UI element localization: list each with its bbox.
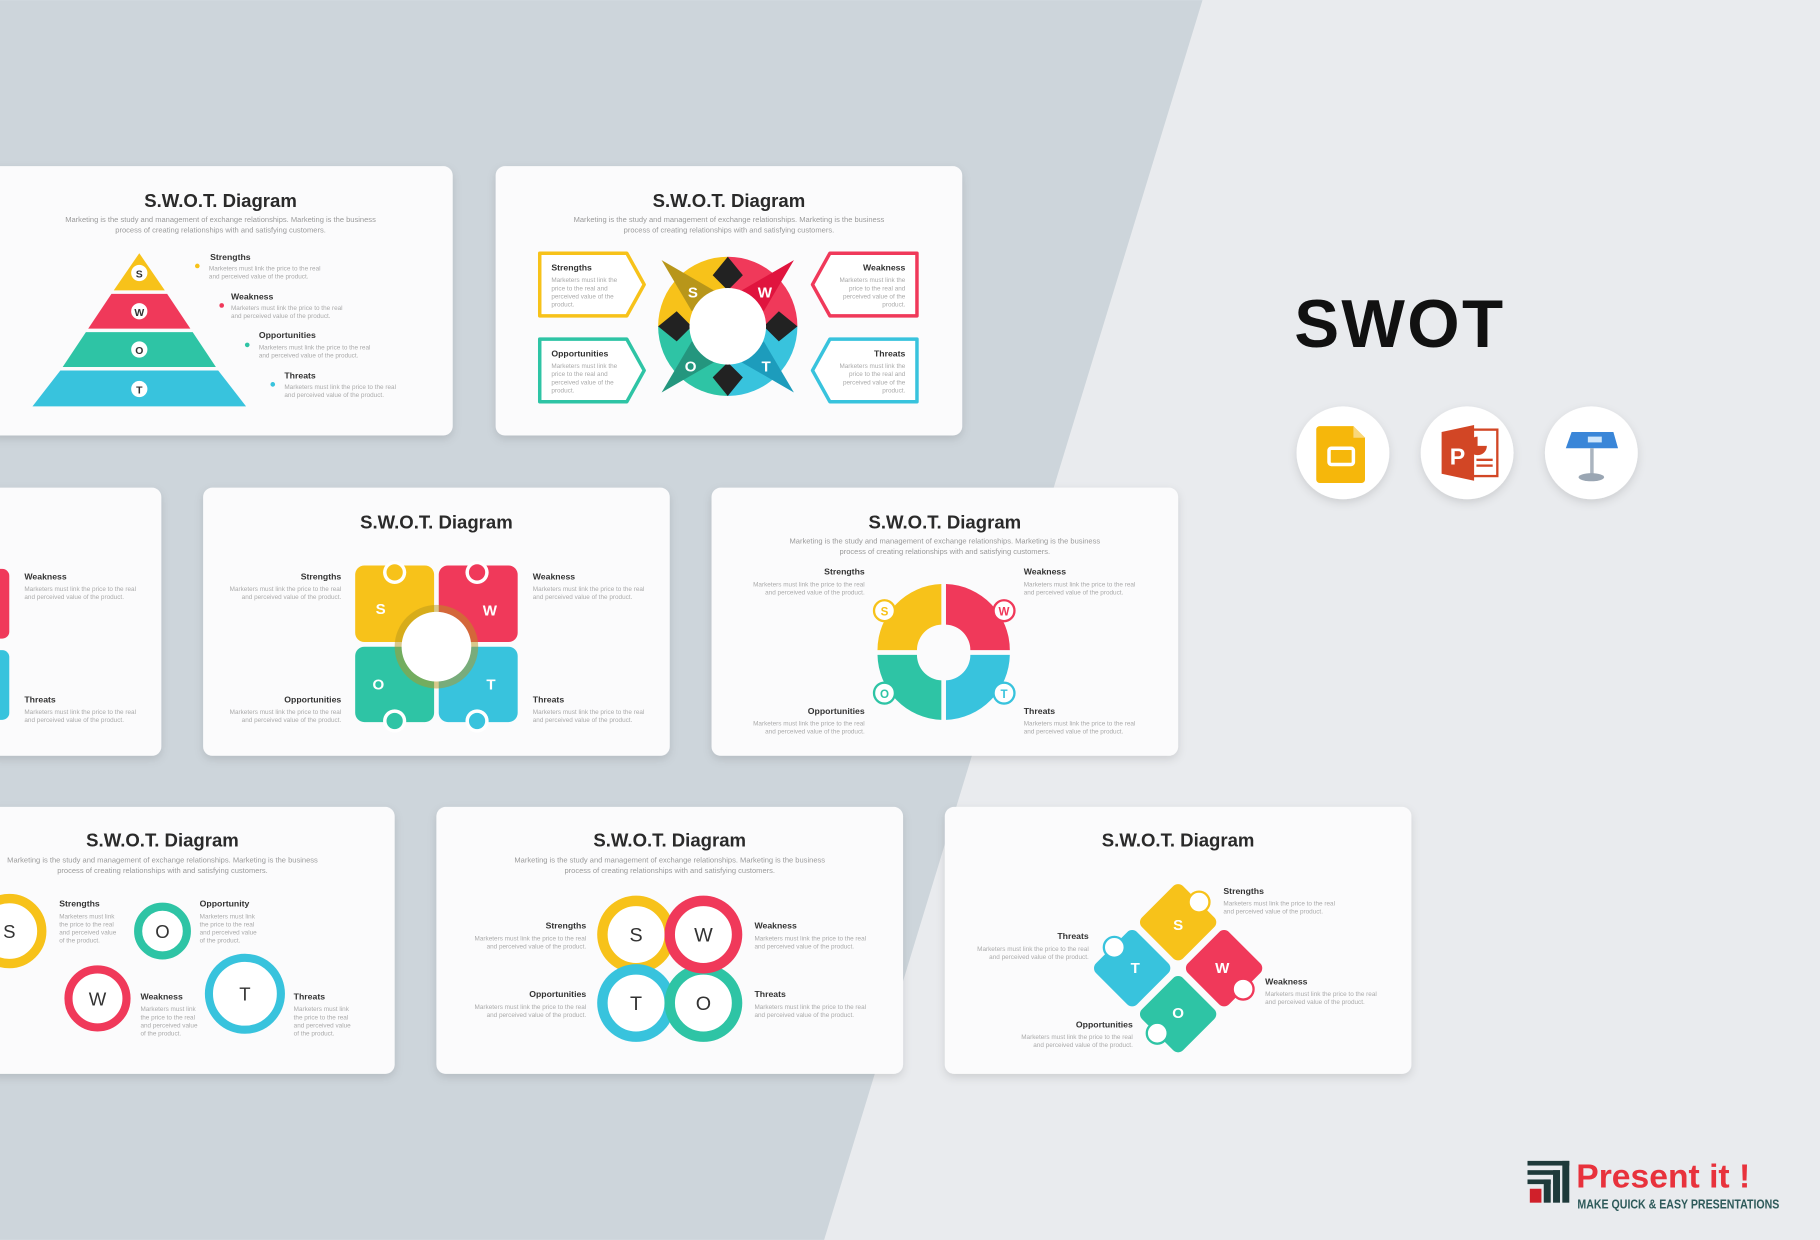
card: pyramid: and perceived value of the product.	[231, 313, 331, 320]
card: compass: Opportunities	[551, 349, 608, 359]
card: donut: Marketing is the study and management of exchange relationships. Marketing is the business	[790, 536, 1100, 545]
card: puzzle: Marketers must link the price to the real	[533, 586, 644, 593]
card: compass: Marketers must link the	[551, 277, 618, 284]
card: scattered circles: Marketers must link	[59, 913, 115, 920]
card: diamond: Marketers must link the price to the real	[1223, 901, 1335, 908]
card: compass: price to the real and	[551, 285, 608, 292]
icon: keynote	[1545, 406, 1638, 499]
card: overlapping rings: T	[630, 993, 642, 1015]
card: donut: and perceived value of the product.	[765, 589, 865, 596]
card: overlapping rings: and perceived value of the product.	[487, 943, 586, 950]
card: scattered circles: the price to the real	[59, 921, 114, 928]
card: diamond: and perceived value of the product.	[1223, 909, 1323, 916]
card: puzzle: T	[486, 677, 496, 694]
card: scattered circles: of the product.	[294, 1031, 335, 1038]
card: donut: Marketers must link the price to the real	[1024, 581, 1135, 588]
card: overlapping rings: W	[694, 925, 713, 947]
card: scattered circles: of the product.	[200, 938, 241, 945]
card: pyramid: and perceived value of the product.	[284, 392, 384, 399]
card: puzzle: Marketers must link the price to the real	[230, 709, 341, 716]
card: scattered circles: process of creating relationships with and satisfying customers.	[57, 866, 268, 875]
card: overlapping rings: and perceived value of the product.	[754, 943, 854, 950]
card: donut: and perceived value of the product.	[1024, 589, 1124, 596]
card: pyramid: Strengths	[210, 252, 251, 262]
card: puzzle: Marketers must link the price to the real	[533, 709, 644, 716]
card: donut: O	[880, 688, 889, 701]
card: donut: S	[881, 605, 889, 618]
card: compass: perceived value of the	[843, 293, 906, 300]
card: overlapping rings: Weakness	[754, 921, 797, 931]
card: partial left row2: Marketers must link the price to the real	[24, 586, 136, 593]
card: diamond: Strengths	[1223, 886, 1264, 896]
card: compass: perceived value of the	[843, 379, 906, 386]
card: compass: Threats	[874, 349, 906, 359]
card: puzzle: Opportunities	[284, 694, 341, 704]
card: compass: price to the real and	[849, 285, 906, 292]
card: puzzle: and perceived value of the product.	[242, 594, 341, 601]
card: compass: Strengths	[551, 263, 592, 273]
card: compass: perceived value of the	[551, 293, 614, 300]
card: pyramid: Marketers must link the price to the real	[284, 384, 396, 391]
card: partial left row2: and perceived value of the product.	[24, 717, 124, 724]
card: scattered circles: O	[155, 921, 170, 942]
card: donut: and perceived value of the product.	[1024, 729, 1124, 736]
card: diamond: and perceived value of the product.	[1033, 1042, 1133, 1049]
card: diamond: Weakness	[1265, 976, 1308, 986]
card: partial left row2: Weakness	[24, 571, 67, 581]
card: scattered circles: of the product.	[140, 1031, 181, 1038]
card: donut: T	[1000, 688, 1008, 701]
card: scattered circles: Threats	[294, 992, 325, 1002]
card: donut: and perceived value of the product.	[765, 729, 865, 736]
card: diamond: and perceived value of the product.	[1265, 999, 1365, 1006]
card: donut: S.W.O.T. Diagram	[868, 511, 1021, 532]
card: diamond: Threats	[1057, 931, 1089, 941]
card: pyramid: Weakness	[231, 292, 273, 302]
card: puzzle	[203, 488, 670, 756]
card: pyramid: Opportunities	[259, 330, 316, 340]
card: overlapping rings: and perceived value of the product.	[754, 1012, 854, 1019]
card: pyramid: Marketers must link the price to the real	[209, 266, 321, 273]
card: donut: Weakness	[1024, 567, 1066, 577]
card: puzzle: S.W.O.T. Diagram	[360, 511, 513, 532]
card: scattered circles: the price to the real	[294, 1014, 348, 1021]
card: scattered circles: Marketers must link	[140, 1006, 197, 1013]
card: overlapping rings: Strengths	[546, 921, 586, 931]
card: pyramid	[0, 166, 453, 435]
card: scattered circles	[0, 807, 395, 1074]
card: scattered circles: the price to the real	[200, 921, 254, 928]
logo: Present it	[1528, 1159, 1779, 1211]
card: overlapping rings: Opportunities	[529, 989, 586, 999]
card: pyramid: Marketers must link the price to the real	[259, 345, 370, 352]
card: overlapping rings: Threats	[754, 989, 786, 999]
card: partial left row2	[0, 488, 161, 756]
card: scattered circles: and perceived value	[200, 930, 257, 937]
card: overlapping rings: Marketers must link the price to the real	[475, 1004, 586, 1011]
card: scattered circles: Strengths	[59, 899, 100, 909]
card: compass: product.	[882, 387, 906, 394]
card: donut	[712, 488, 1178, 756]
card: compass: perceived value of the	[551, 379, 614, 386]
card: diamond: O	[1172, 1005, 1184, 1022]
card: pyramid: Marketing is the study and management of exchange relationships. Marketing is the business	[65, 215, 376, 224]
card: donut: W	[999, 605, 1010, 618]
card: puzzle: O	[373, 677, 385, 694]
card: scattered circles: W	[89, 988, 107, 1009]
card: compass: product.	[551, 302, 575, 309]
card: overlapping rings: O	[696, 993, 711, 1015]
card: overlapping rings: Marketers must link the price to the real	[754, 935, 866, 942]
card: diamond: Opportunities	[1076, 1019, 1133, 1029]
card: diamond: S.W.O.T. Diagram	[1102, 829, 1254, 850]
card: overlapping rings: Marketing is the study and management of exchange relationships. Marketing is the business	[514, 856, 825, 865]
card: puzzle: Marketers must link the price to the real	[230, 586, 341, 593]
card: puzzle: Weakness	[533, 571, 575, 581]
card: scattered circles: the price to the real	[140, 1014, 195, 1021]
card: puzzle: W	[483, 602, 498, 619]
card: overlapping rings	[436, 807, 903, 1074]
card: diamond: W	[1215, 960, 1230, 977]
card: overlapping rings: S.W.O.T. Diagram	[593, 829, 746, 850]
card: puzzle: Threats	[533, 694, 564, 704]
card: compass: S	[688, 284, 698, 301]
card: puzzle: and perceived value of the product.	[242, 717, 341, 724]
card: diamond: Marketers must link the price to the real	[1265, 991, 1377, 998]
card: scattered circles: S	[3, 921, 15, 942]
card: donut: Strengths	[824, 567, 865, 577]
card: compass: product.	[551, 387, 575, 394]
card: compass: Weakness	[863, 263, 906, 273]
card: partial left row2: Marketers must link the price to the real	[24, 709, 136, 716]
card: scattered circles: Weakness	[140, 992, 183, 1002]
card: compass: Marketing is the study and management of exchange relationships. Marketing is the business	[574, 215, 884, 224]
card: compass	[496, 166, 962, 435]
card: compass: price to the real and	[551, 371, 608, 378]
card: pyramid: T	[136, 386, 143, 397]
card: scattered circles: S.W.O.T. Diagram	[86, 829, 239, 850]
logo: Present it: Present it !	[1576, 1159, 1750, 1196]
card: pyramid: S	[136, 270, 143, 281]
card: compass: O	[685, 359, 697, 376]
card: donut: process of creating relationships with and satisfying customers.	[840, 547, 1050, 556]
card: partial left row2: Threats	[24, 694, 56, 704]
card: pyramid: and perceived value of the product.	[259, 353, 359, 360]
card: overlapping rings: and perceived value of the product.	[487, 1012, 586, 1019]
card: compass: Marketers must link the	[551, 363, 618, 370]
card: donut: Marketers must link the price to the real	[1024, 721, 1135, 728]
icon: google slides	[1297, 406, 1389, 499]
card: pyramid: Threats	[284, 371, 316, 381]
card: diamond: Marketers must link the price to the real	[977, 946, 1089, 953]
card: overlapping rings: S	[629, 925, 643, 947]
card: compass: S.W.O.T. Diagram	[653, 190, 805, 211]
card: puzzle: and perceived value of the product.	[533, 717, 633, 724]
card: pyramid: O	[135, 346, 143, 357]
card: overlapping rings: Marketers must link the price to the real	[475, 935, 586, 942]
card: donut: Opportunities	[808, 706, 865, 716]
card: scattered circles: Marketers must link	[200, 913, 256, 920]
card: scattered circles: and perceived value	[294, 1022, 351, 1029]
card: scattered circles: and perceived value	[59, 930, 117, 937]
card: puzzle: and perceived value of the product.	[533, 594, 633, 601]
card: diamond: T	[1131, 960, 1141, 977]
card: partial left row2: and perceived value of the product.	[24, 594, 124, 601]
card: overlapping rings: process of creating relationships with and satisfying customers.	[564, 866, 775, 875]
card: scattered circles: Marketing is the study and management of exchange relationships. Marketing is the business	[7, 856, 318, 865]
card: scattered circles: of the product.	[59, 938, 100, 945]
card: overlapping rings: Marketers must link the price to the real	[754, 1004, 866, 1011]
card: scattered circles: T	[239, 984, 251, 1005]
card: diamond: and perceived value of the product.	[989, 954, 1089, 961]
icon: powerpoint	[1421, 406, 1514, 499]
card: scattered circles: Opportunity	[200, 899, 250, 909]
card: compass: process of creating relationships with and satisfying customers.	[624, 225, 834, 234]
card: pyramid: and perceived value of the product.	[209, 274, 309, 281]
card: scattered circles: and perceived value	[140, 1022, 198, 1029]
card: pyramid: W	[134, 308, 144, 319]
icon: powerpoint: P	[1450, 443, 1465, 469]
card: compass: price to the real and	[849, 371, 906, 378]
card: compass: T	[761, 359, 771, 376]
card: puzzle: S	[376, 601, 386, 618]
card: scattered circles: Marketers must link	[294, 1006, 350, 1013]
card: diamond	[945, 807, 1411, 1074]
card: pyramid: Marketers must link the price to the real	[231, 305, 343, 312]
card: donut: Marketers must link the price to the real	[753, 581, 865, 588]
card: donut: Threats	[1024, 706, 1055, 716]
card: donut: Marketers must link the price to the real	[753, 721, 865, 728]
card: puzzle: Strengths	[301, 571, 341, 581]
heading: SWOT: SWOT	[1294, 287, 1505, 362]
card: compass: Marketers must link the	[839, 363, 906, 370]
card: diamond: Marketers must link the price to the real	[1021, 1034, 1133, 1041]
card: compass: W	[758, 284, 773, 301]
card: compass: Marketers must link the	[839, 277, 906, 284]
card: diamond: S	[1173, 917, 1183, 934]
card: compass: product.	[882, 302, 906, 309]
card: pyramid: S.W.O.T. Diagram	[144, 190, 297, 211]
card: pyramid: process of creating relationships with and satisfying customers.	[115, 225, 326, 234]
